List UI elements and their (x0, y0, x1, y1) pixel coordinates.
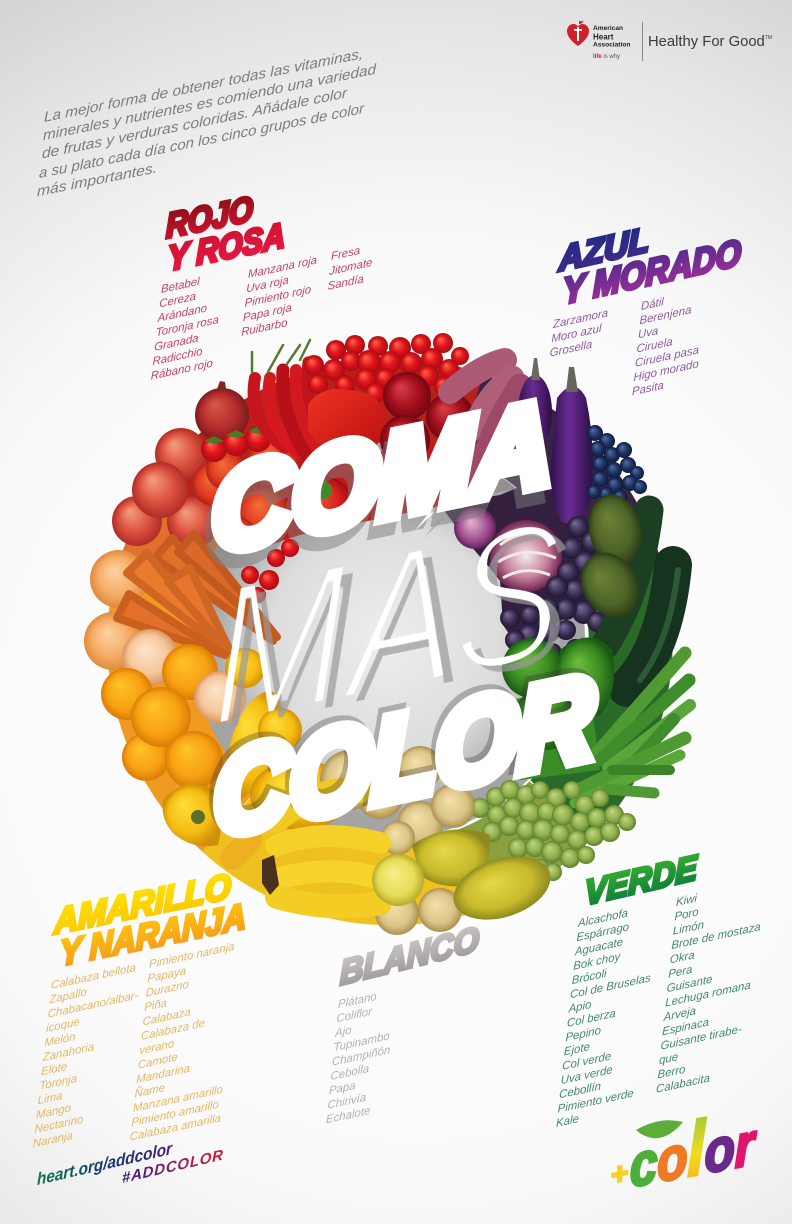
list: amarillo column 2: Durazno (146, 979, 189, 1000)
list: blanco (326, 988, 390, 1126)
list: amarillo column 1: Zanahoria (42, 1041, 95, 1064)
list: verde column 1: Aguacate (574, 936, 623, 959)
green grapes (470, 780, 636, 881)
list: amarillo column 2: Calabaza de (141, 1017, 205, 1043)
banana stem (262, 855, 279, 895)
carrots (117, 534, 277, 655)
list: amarillo column 1: Mango (36, 1102, 72, 1122)
divider line (642, 22, 643, 61)
list: verde column 2: Okra (670, 949, 695, 966)
list: amarillo column 2: Manzana amarillo (133, 1084, 223, 1115)
list: blanco: Papa (329, 1080, 356, 1097)
list: rojo column 2: Pimiento rojo (245, 284, 312, 310)
yellow pepper (162, 784, 221, 846)
heading: AZUL Y MORADO (558, 199, 741, 313)
icon: heart and torch (567, 20, 589, 46)
intro paragraph: minerales y nutrientes es comiendo una variedad (43, 62, 377, 144)
text: Healthy For Good: TM (765, 35, 772, 41)
list: azul column 1: Moro azul (551, 323, 602, 345)
logo: American Heart Association, Healthy For Good (567, 20, 772, 61)
yellow fruits (162, 648, 559, 935)
list: verde column 1: Kale (556, 1113, 579, 1130)
list: verde column 2: Guisante (667, 974, 712, 995)
heading: VERDE: VERDE (585, 847, 698, 913)
heading: AZUL Y MORADO: Y MORADO (563, 231, 741, 312)
list: rojo column 1: Betabel (161, 276, 200, 296)
list: amarillo column 1: Nectarino (34, 1114, 84, 1136)
lemon pile (225, 648, 265, 688)
pale onion (122, 629, 178, 685)
intro paragraph: más importantes. (37, 161, 157, 200)
list: rojo column 1: Rábano rojo (151, 358, 213, 383)
heading: AZUL Y MORADO: AZUL (558, 219, 649, 279)
small cherries (241, 539, 299, 603)
list: verde column 1: Brócoli (572, 968, 607, 987)
onions (90, 550, 148, 608)
list: rojo column 1: Cereza (159, 291, 197, 310)
title: MÁS: MÁS (212, 476, 562, 770)
list: azul column 2: Pasita (632, 380, 664, 398)
list: amarillo column 1: Melón (44, 1031, 75, 1050)
list: verde column 2: Brote de mostaza (671, 921, 761, 952)
zucchini (605, 510, 678, 688)
text: American Heart Association: American (593, 25, 623, 32)
list: verde column 2: Calabacita (656, 1072, 710, 1096)
potatoes (320, 746, 475, 935)
list: rojo column 3 (328, 242, 372, 293)
logo: American Heart Association, Healthy For Good: Heart (593, 32, 614, 42)
text: #ADDCOLOR: #ADDCOLOR (122, 1147, 223, 1187)
red apples (383, 372, 431, 420)
list: verde column 1: Col de Bruselas (570, 972, 651, 1001)
purple grapes (500, 516, 607, 663)
list: verde column 1: Bok choy (573, 951, 621, 973)
fruit and vegetable wheel (84, 333, 690, 935)
list: verde column 2: Limón (673, 919, 704, 938)
list: blanco: Ajo (334, 1024, 352, 1040)
squash (225, 690, 283, 800)
list: rojo column 2 (241, 254, 318, 339)
list: rojo column 2: Ruibarbo (241, 317, 288, 339)
heading: ROJO Y ROSA (166, 183, 285, 279)
list: blanco: Chirivía (328, 1092, 367, 1112)
list: verde column 1: Espárrago (576, 921, 630, 944)
list: amarillo column 2: Camote (138, 1051, 178, 1072)
list: verde column 2: Poro (674, 906, 699, 923)
heading: AMARILLO Y NARANJA: AMARILLO (53, 865, 231, 942)
heading: ROJO Y ROSA: ROJO (166, 190, 253, 246)
list: verde column 1: Col verde (562, 1051, 611, 1073)
list: amarillo column 2: Calabaza amarilla (130, 1112, 222, 1144)
list: amarillo column 2: verano (139, 1038, 175, 1057)
list: amarillo column 2: Mandarina (136, 1063, 191, 1086)
title: COLOR shadow: COLOR (210, 645, 590, 858)
title: COLOR: COLOR (214, 650, 594, 863)
list: rojo column 2: Manzana roja (248, 254, 318, 281)
list: amarillo column 1: icoque (46, 1016, 80, 1035)
list: azul column 2: Higo morado (634, 358, 699, 384)
list: azul column 2: Uva (638, 325, 659, 341)
coloured ring base (149, 400, 631, 883)
list: amarillo column 2: Piña (144, 997, 168, 1014)
sweet potatoes (450, 360, 520, 495)
list: verde column 2 (656, 879, 761, 1096)
list: rojo column 3: Fresa (331, 245, 361, 263)
blueberries (587, 425, 647, 504)
list: verde column 2: que (659, 1051, 678, 1067)
list: verde column 2: Guisante tirabe- (661, 1024, 742, 1053)
list: blanco: Tupinambo (334, 1030, 390, 1054)
list: verde column 1: Uva verde (561, 1064, 613, 1087)
list: verde column 2: Lechuga romana (665, 979, 751, 1010)
heading: AMARILLO Y NARANJA: Y NARANJA (60, 895, 246, 974)
green fruits (470, 489, 690, 881)
icon: leaf (636, 1120, 683, 1138)
list: verde column 2: Pera (668, 964, 693, 981)
chili peppers (252, 340, 328, 455)
list: azul column 2: Dátil (641, 296, 664, 313)
cherry tomatoes (304, 333, 469, 403)
list: rojo column 1: Radicchio (152, 346, 203, 368)
avocados (582, 489, 648, 571)
list: amarillo column 1: Zapallo (48, 986, 87, 1007)
okra (575, 653, 690, 803)
logo: American Heart Association, Healthy For Good: Association (593, 42, 630, 48)
list: amarillo column 2: Pimiento amarillo (131, 1099, 219, 1129)
heading: BLANCO: BLANCO (340, 919, 479, 993)
list: azul column 1 (550, 307, 609, 360)
star fruits (412, 829, 490, 886)
list: rojo column 2: Papa roja (243, 302, 292, 324)
heading: ROJO Y ROSA: Y ROSA (168, 216, 285, 279)
list: rojo column 1: Toronja rosa (156, 314, 219, 339)
dark purple base (440, 470, 590, 650)
list: azul column 2: Ciruela pasa (635, 344, 700, 370)
list: azul column 1: Zarzamora (552, 307, 609, 331)
eggplant small (518, 375, 552, 449)
list: blanco: Coliflor (336, 1006, 373, 1025)
red fruits (112, 333, 474, 603)
list: amarillo column 1: Toronja (39, 1073, 78, 1093)
intro paragraph: de frutas y verduras coloridas. Añádale color (42, 85, 348, 162)
list: verde column 2: Arveja (663, 1005, 697, 1024)
list: rojo column 1 (151, 272, 219, 383)
list: verde column 1: Ejote (564, 1041, 590, 1059)
list: amarillo column 2 (130, 941, 235, 1144)
red onion (454, 507, 496, 549)
list: amarillo column 2: Ñame (135, 1081, 165, 1100)
list: blanco: Plátano (338, 991, 377, 1011)
purple fruits (440, 358, 647, 663)
web address and hashtag (37, 1138, 223, 1189)
list: verde column 2: Berro (658, 1064, 686, 1081)
list: amarillo column 2: Pimiento naranja (149, 941, 235, 971)
intro paragraph (37, 44, 377, 200)
yellow apple (372, 854, 424, 906)
text: life is why: life is why (593, 54, 620, 60)
list: verde column 1: Pepino (565, 1025, 601, 1044)
eggplant large (551, 386, 593, 524)
title: MÁS shadow: MÁS (222, 482, 572, 776)
list: rojo column 2: Uva roja (246, 274, 289, 295)
list: blanco: Cebolla (330, 1063, 370, 1083)
orange fruits (84, 534, 277, 789)
list: verde column 1: Col berza (567, 1008, 616, 1030)
list: amarillo column 2: Papaya (147, 965, 187, 985)
text: Healthy For Good: Healthy For Good (648, 34, 765, 50)
list: verde column 1: Pimiento verde (558, 1088, 634, 1116)
list: amarillo column 1 (33, 962, 138, 1150)
radicchio (490, 520, 562, 592)
list: rojo column 3: Jitomate (328, 257, 372, 278)
list: verde column 1: Cebollín (559, 1081, 601, 1101)
centre disc (185, 440, 585, 840)
heading: AMARILLO Y NARANJA (53, 862, 246, 975)
list: azul column 1: Grosella (550, 339, 593, 360)
list: amarillo column 1: Elote (41, 1061, 67, 1078)
intro paragraph: La mejor forma de obtener todas las vitaminas, (44, 46, 363, 126)
list: rojo column 1: Arándano (157, 302, 208, 325)
list: amarillo column 1: Chabacano/albar- (48, 990, 138, 1021)
list: amarillo column 2: Calabaza (143, 1006, 191, 1029)
text: +color letters: color (630, 1096, 757, 1204)
list: amarillo column 1: Calabaza bellota (51, 962, 136, 992)
list: verde column 2: Kiwi (676, 893, 697, 909)
list: verde column 1 (556, 903, 651, 1130)
green peppers (502, 638, 562, 698)
list: verde column 2: Espinaca (662, 1016, 710, 1038)
list: verde column 1: Apio (568, 999, 592, 1016)
title: COMA: COMA (212, 376, 552, 579)
list: rojo column 3: Sandía (328, 273, 364, 293)
list: azul column 2: Berenjena (640, 304, 692, 327)
list: blanco: Echalote (326, 1105, 370, 1126)
text: heart.org/addcolor: heart.org/addcolor (37, 1138, 173, 1189)
list: azul column 2 (632, 289, 700, 398)
logo: +color (611, 1096, 757, 1207)
bananas (232, 790, 380, 906)
red mass behind title (240, 440, 470, 550)
list: rojo column 1: Granada (154, 332, 199, 354)
list: verde column 1: Alcachofa (577, 907, 629, 930)
list: blanco: Champiñón (332, 1044, 390, 1069)
oranges (101, 668, 153, 720)
list: amarillo column 1: Lima (38, 1090, 63, 1107)
strawberries (201, 436, 227, 462)
intro paragraph: a su plato cada día con los cinco grupos de color (39, 101, 365, 182)
title: COMA shadow: COMA (206, 390, 546, 593)
red bell pepper (308, 389, 385, 455)
list: azul column 2: Ciruela (636, 336, 673, 356)
text: +color letters: + (611, 1156, 629, 1192)
list: amarillo column 1: Naranja (33, 1130, 73, 1150)
